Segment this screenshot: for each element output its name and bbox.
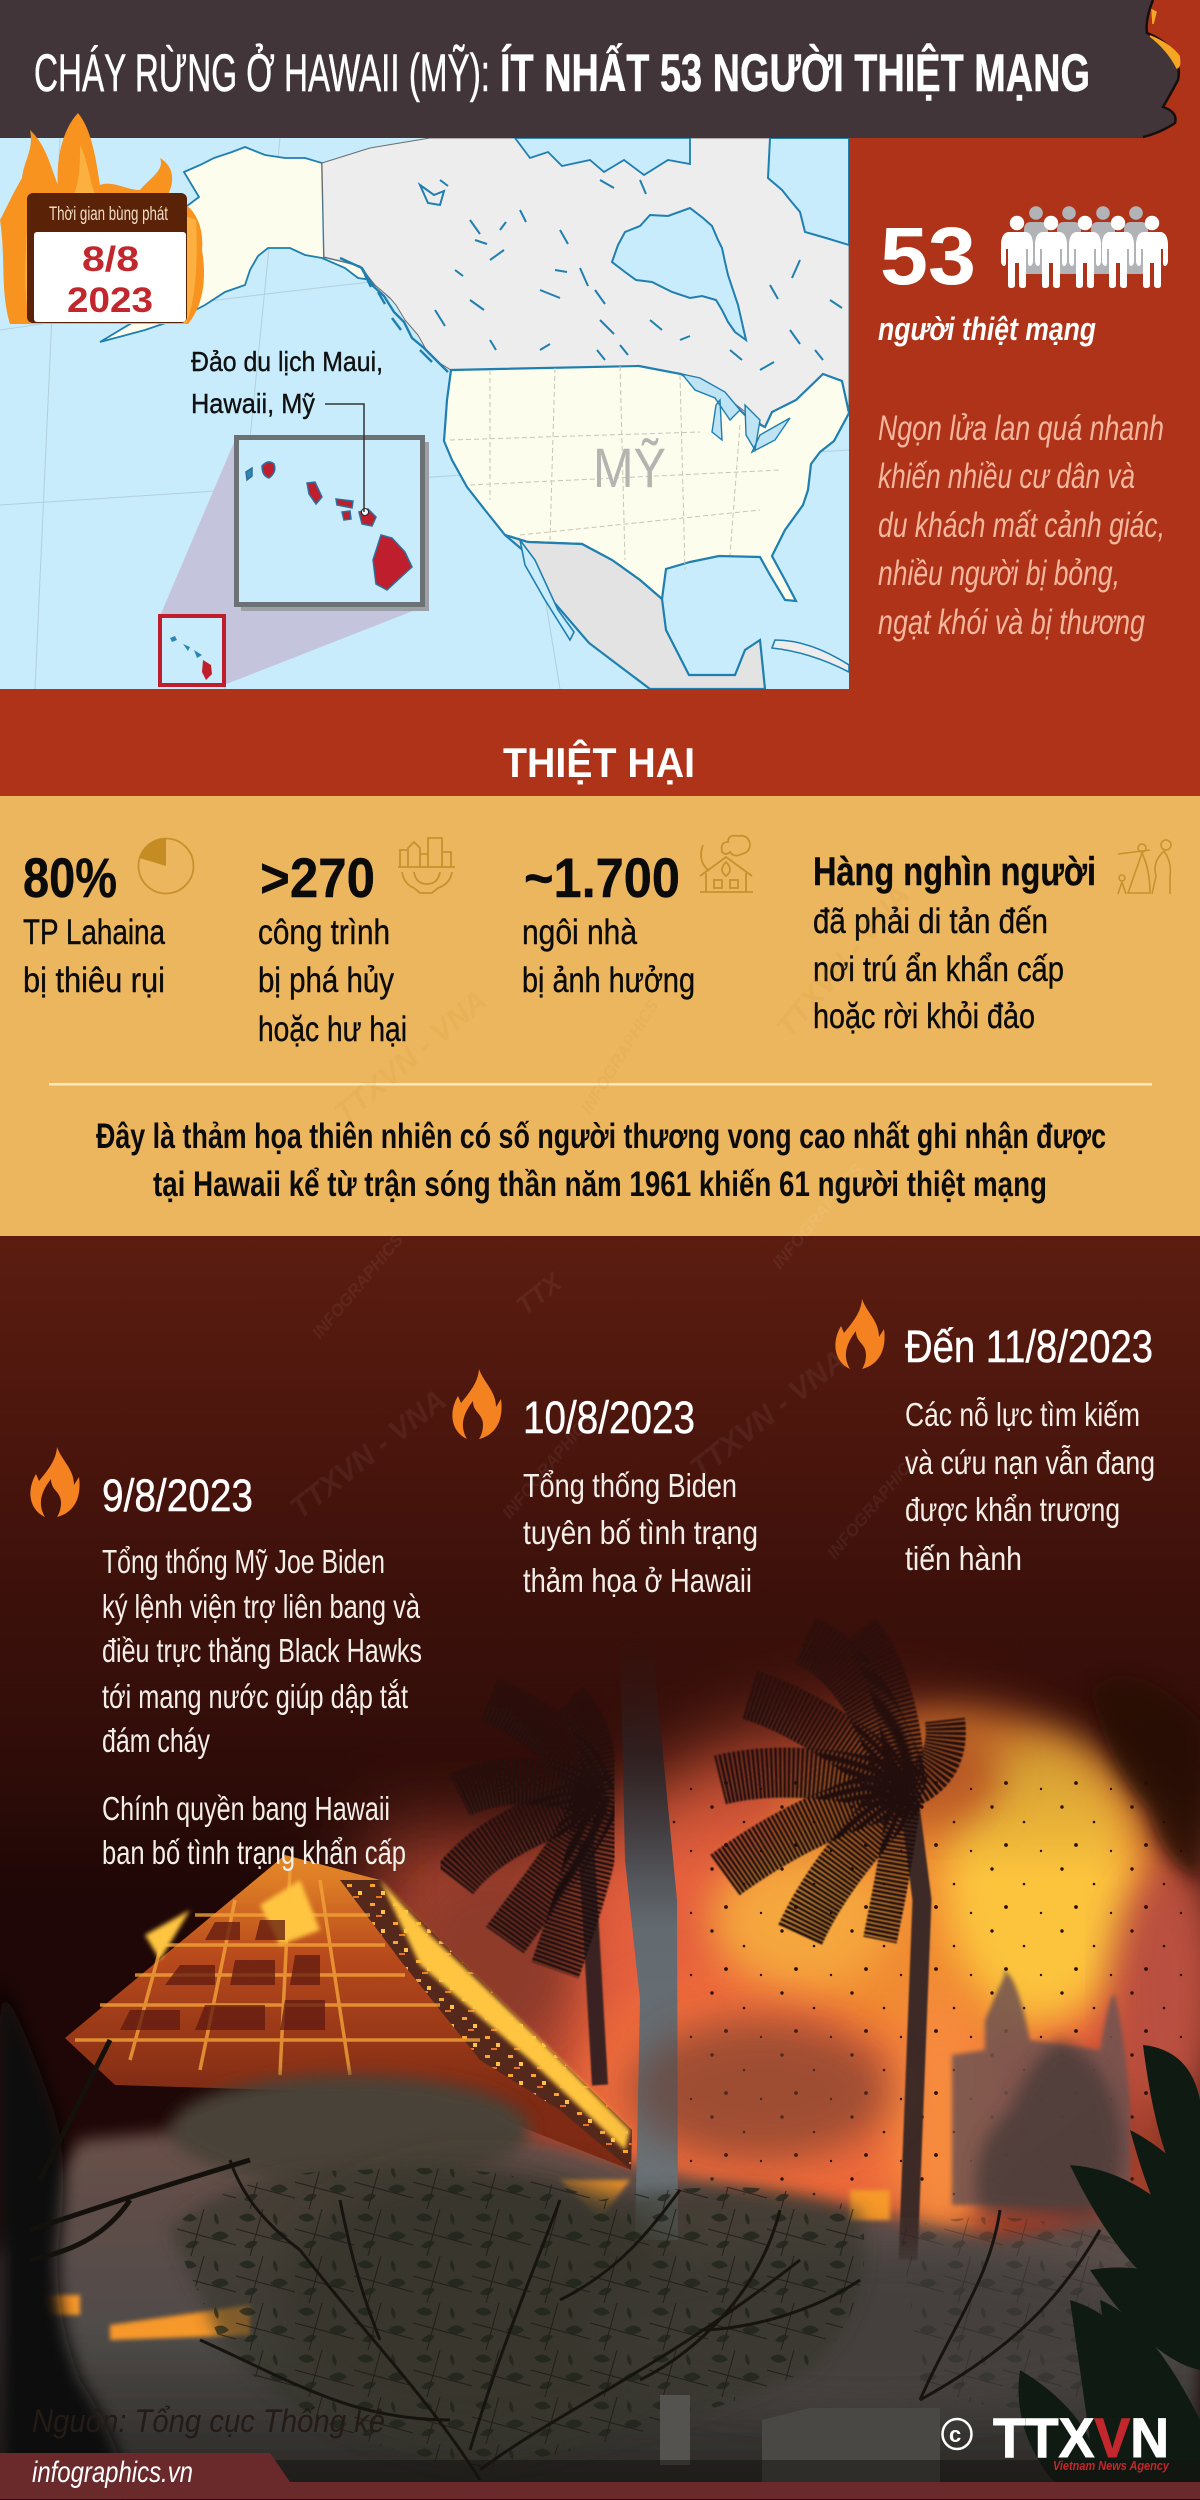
land: Alaska (100, 147, 390, 342)
date 2 text (523, 1467, 758, 1599)
stat: 80%: bị thiêu rụi (23, 961, 165, 1000)
bottom darkening (0, 2460, 1200, 2500)
background: red upper band (0, 0, 1200, 796)
callout: Maui label: Đảo du lịch Maui, (191, 346, 383, 377)
icon: fleeing people (1118, 840, 1171, 894)
section heading: Thiệt hại: THIỆT HẠI (503, 738, 695, 786)
stat label: người thiệt mạng (878, 311, 1096, 347)
footer site label: infographics.vn (32, 2456, 193, 2489)
coast: British Columbia (340, 258, 448, 372)
date 1 text (102, 1543, 422, 1871)
water: Hudson Bay (612, 208, 746, 340)
header bar (0, 0, 1180, 138)
photo haze ground (0, 2110, 1200, 2500)
stat: 80% (23, 846, 165, 1000)
water: Arctic north (515, 138, 690, 175)
badge date: 2023 (67, 281, 153, 320)
water: Cuba (772, 640, 849, 672)
date 2 text: thảm họa ở Hawaii (523, 1562, 752, 1599)
icon: buildings and gear (398, 838, 455, 893)
timeline: 10/8/2023 (452, 1369, 758, 1599)
date 3 text: tiến hành (905, 1540, 1022, 1577)
right foreground leaves (1019, 2045, 1200, 2500)
map label: Mỹ: MỸ (593, 436, 666, 499)
stone wall in foreground (762, 2408, 940, 2485)
fade into background (0, 1600, 1200, 1880)
stat: evacuees: hoặc rời khỏi đảo (813, 997, 1035, 1036)
watermarks: TTXVN - VNA (684, 1344, 853, 1486)
icon: flame 3 (835, 1299, 885, 1369)
callout: Maui label (191, 346, 383, 419)
inset shadow (241, 442, 429, 611)
stat: 80%: 80% (23, 846, 117, 909)
date 2 text: tuyên bố tình trạng (523, 1514, 758, 1551)
watermarks: TTXVN - VNA (284, 1384, 453, 1526)
badge label: Thời gian bùng phát (49, 204, 169, 225)
land: Mexico (505, 535, 765, 689)
stat: evacuees: đã phải di tản đến (813, 902, 1048, 941)
foreground tree foliage (170, 2168, 1141, 2470)
water: Labrador sea (768, 138, 849, 245)
left palm (455, 1700, 600, 2085)
summary statement (96, 1117, 1106, 1204)
stat: 270: >270 (260, 846, 375, 909)
divider (49, 1083, 1152, 1086)
stone post (660, 2395, 690, 2465)
timeline: 11/8/2023 (835, 1299, 1155, 1577)
background: dark lower panel (0, 1236, 1200, 2500)
date 1 text: tới mang nước giúp dập tắt (102, 1678, 408, 1715)
date 1 text: đám cháy (102, 1722, 210, 1759)
stat: 270: bị phá hủy (258, 961, 394, 1000)
right palm (720, 1630, 946, 2260)
timeline: 9/8/2023 (30, 1447, 422, 1871)
photo specks (640, 1780, 1200, 2200)
left wall fire (40, 2180, 890, 2340)
map of North America (0, 138, 849, 689)
upper right leaf shadows (1090, 1675, 1200, 1880)
water: Great Lakes (682, 374, 790, 452)
date 3 text: được khẩn trương (905, 1491, 1120, 1528)
date badge flame (0, 113, 204, 324)
side paragraph: nhiều người bị bỏng, (878, 554, 1120, 593)
small lakes (420, 180, 842, 370)
callout: Maui label: Hawaii, Mỹ (191, 388, 315, 419)
icon: people group (1001, 206, 1168, 288)
stat: 1.700: bị ảnh hưởng (522, 961, 695, 1000)
central palm trunk (620, 1640, 678, 2240)
icon: pie (138, 838, 194, 894)
title (34, 42, 1090, 103)
copyright symbol (942, 2419, 972, 2449)
date 1: 9/8/2023 (102, 1470, 253, 1521)
date badge (27, 193, 187, 323)
distant building towers (952, 1970, 1130, 2205)
left dark tree mass (0, 1980, 130, 2500)
stat: 270 (258, 846, 407, 1049)
date 3 text (905, 1396, 1155, 1577)
stat: 270: công trình (258, 913, 390, 952)
zoom wedge (160, 440, 423, 685)
land: Canada (322, 138, 849, 427)
burning roof (65, 1855, 632, 2170)
callout leader line (325, 404, 364, 512)
photo: burning town (0, 1600, 1200, 2500)
watermarks (284, 879, 922, 1563)
stat: 53: 53 (880, 211, 976, 302)
watermarks: INFOGRAPHICS (499, 1410, 597, 1523)
date 1 text: Chính quyền bang Hawaii (102, 1790, 390, 1827)
badge date (67, 240, 153, 320)
stat: evacuees (813, 850, 1096, 1036)
watermarks: INFOGRAPHICS (309, 1230, 407, 1343)
watermarks: INFOGRAPHICS (577, 996, 663, 1117)
watermarks: INFOGRAPHICS (769, 1160, 867, 1273)
left tree branches (30, 2040, 250, 2260)
stat: evacuees: nơi trú ẩn khẩn cấp (813, 950, 1064, 989)
date 1 text: ký lệnh viện trợ liên bang và (102, 1588, 420, 1625)
date 1 text: điều trực thăng Black Hawks (102, 1632, 422, 1669)
water: Gulf of California (520, 540, 574, 640)
date 1 text: ban bố tình trạng khẩn cấp (102, 1834, 406, 1871)
date 2: 10/8/2023 (523, 1392, 695, 1443)
side paragraph (878, 409, 1165, 642)
dark bushes behind tree (170, 2020, 1160, 2430)
background: tan damage band (0, 796, 1200, 1236)
footer bar (0, 2453, 1200, 2499)
stat: 270: hoặc hư hại (258, 1010, 407, 1049)
source line: Nguồn: Tổng cục Thống kê (32, 2403, 385, 2439)
icon: flame 2 (452, 1369, 502, 1439)
stat: 1.700 (522, 846, 695, 1000)
watermarks: TTXVN - VNA (770, 879, 916, 1044)
title: CHÁY RỪNG Ở HAWAII (MỸ): (34, 43, 490, 103)
logo: TTXVN: TTXVN (993, 2406, 1169, 2469)
watermarks: TTXVN - VNA (328, 984, 494, 1130)
photo glow (370, 1710, 1200, 2280)
Maui marker (362, 508, 368, 516)
badge date: 8/8 (82, 240, 139, 279)
date 3: Đến 11/8/2023 (905, 1321, 1153, 1372)
stat: 1.700: ~1.700 (524, 846, 680, 909)
inset box (236, 438, 422, 604)
watermarks: INFOGRAPHICS (824, 1450, 922, 1563)
date 1 text: Tổng thống Mỹ Joe Biden (102, 1543, 385, 1580)
icon: burning house (700, 836, 753, 892)
date 3 text: Các nỗ lực tìm kiếm (905, 1396, 1140, 1433)
small red locator box (160, 616, 224, 685)
logo tagline: Vietnam News Agency (1053, 2458, 1170, 2473)
date 2 text: Tổng thống Biden (523, 1467, 737, 1504)
copyright symbol: c (949, 2422, 961, 2447)
stat: evacuees: Hàng nghìn người (813, 850, 1096, 894)
icon: flame 1 (30, 1447, 80, 1517)
land: USA (444, 366, 849, 601)
foreground branches (200, 2160, 1100, 2480)
Hawaii islands inset (246, 462, 412, 590)
state lines (450, 366, 780, 570)
distant palm (976, 2040, 1122, 2220)
stat: 80%: TP Lahaina (23, 913, 165, 952)
stat: 1.700: ngôi nhà (522, 913, 637, 952)
watermarks: TTX (510, 1266, 569, 1321)
